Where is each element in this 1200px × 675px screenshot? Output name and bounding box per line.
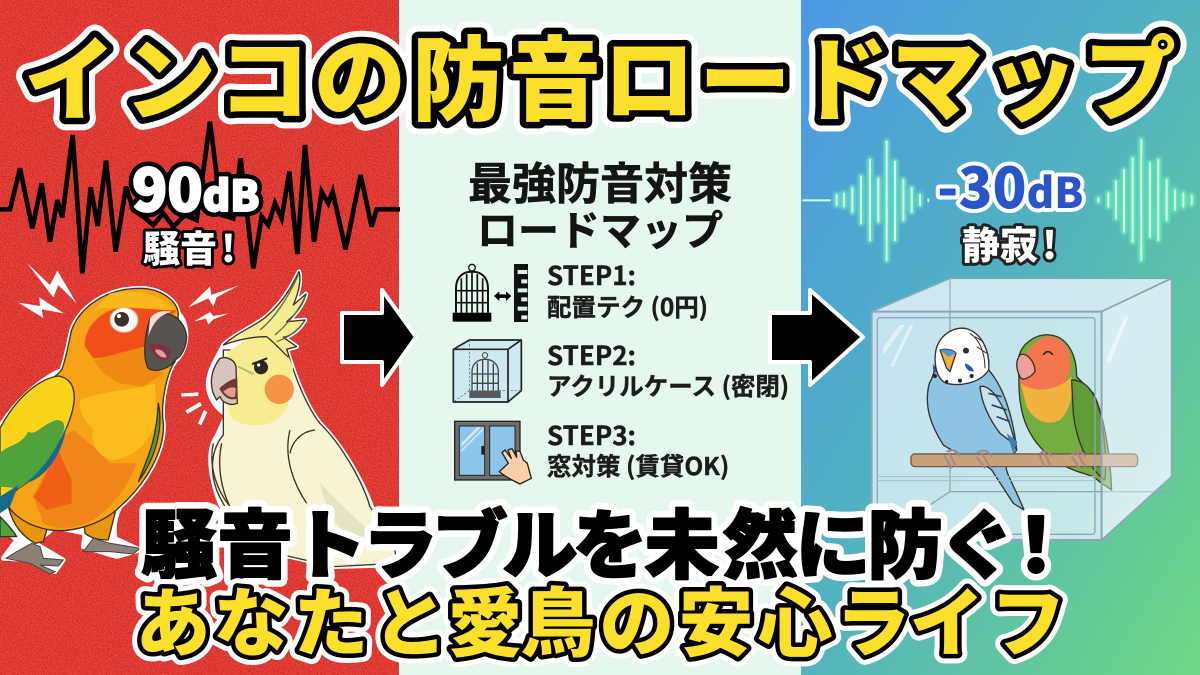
heading: roadmap: ロードマップ	[477, 197, 723, 257]
headline: prevent noise trouble: 騒音トラブルを未然に防ぐ！	[141, 485, 1074, 594]
perch	[911, 450, 1138, 468]
chart: noisy sound waveform	[0, 122, 400, 273]
icon: window and hand	[455, 421, 531, 484]
text: step 3: STEP3:	[547, 416, 636, 453]
text: step 1: STEP1:	[547, 256, 636, 293]
headline: peace of mind life: あなたと愛鳥の安心ライフ	[135, 563, 1066, 672]
chart: calm sound waves	[803, 140, 1192, 260]
panel: roadmap background	[399, 0, 801, 675]
title: インコの防音ロードマップ	[24, 7, 1176, 140]
text: step 1	[547, 256, 708, 324]
beak	[211, 358, 237, 404]
icon: cage beside wall	[453, 264, 528, 322]
noise level label: 90dB	[132, 144, 259, 228]
case frame	[872, 278, 1172, 312]
text: step 3	[547, 416, 729, 483]
icon: acrylic case	[453, 340, 521, 402]
feet	[6, 543, 63, 574]
quiet level label: -30dB	[937, 144, 1083, 225]
arrow: roadmap to quiet	[770, 290, 863, 385]
noise level label: 90dB	[132, 144, 259, 228]
noise level label: 騒音!	[143, 219, 236, 273]
lovebird	[1017, 335, 1112, 490]
icon: shout bursts	[18, 263, 239, 425]
illustration: sun conure	[0, 288, 187, 574]
panel: noisy red background	[0, 0, 399, 675]
headline: prevent noise trouble: 騒音トラブルを未然に防ぐ！	[141, 485, 1074, 594]
text: step 2: STEP2:	[547, 336, 636, 373]
illustration: cockatiel	[208, 272, 400, 567]
arrow: problem to roadmap	[342, 290, 416, 385]
headline: peace of mind life: あなたと愛鳥の安心ライフ	[135, 563, 1066, 672]
budgie	[927, 328, 1024, 510]
eye	[110, 308, 138, 332]
beak	[145, 314, 187, 370]
illustration: acrylic case with birds	[872, 278, 1172, 540]
heading: roadmap	[468, 148, 732, 257]
text: step 2: アクリルケース (密閉)	[547, 368, 789, 403]
heading: roadmap: 最強防音対策	[468, 148, 732, 212]
quiet level label: 静寂!	[962, 215, 1057, 270]
headline: peace of mind life: あなたと愛鳥の安心ライフ	[135, 563, 1066, 672]
text: step 1: 配置テク (0円)	[547, 289, 708, 324]
quiet level label	[937, 144, 1083, 270]
title: インコの防音ロードマップ	[24, 7, 1176, 140]
text: step 2	[547, 336, 789, 403]
panel: quiet gradient background	[801, 0, 1200, 675]
noise level label	[132, 144, 259, 273]
title: インコの防音ロードマップ	[24, 7, 1176, 140]
text: step 3: 窓対策 (賃貸OK)	[547, 448, 729, 483]
